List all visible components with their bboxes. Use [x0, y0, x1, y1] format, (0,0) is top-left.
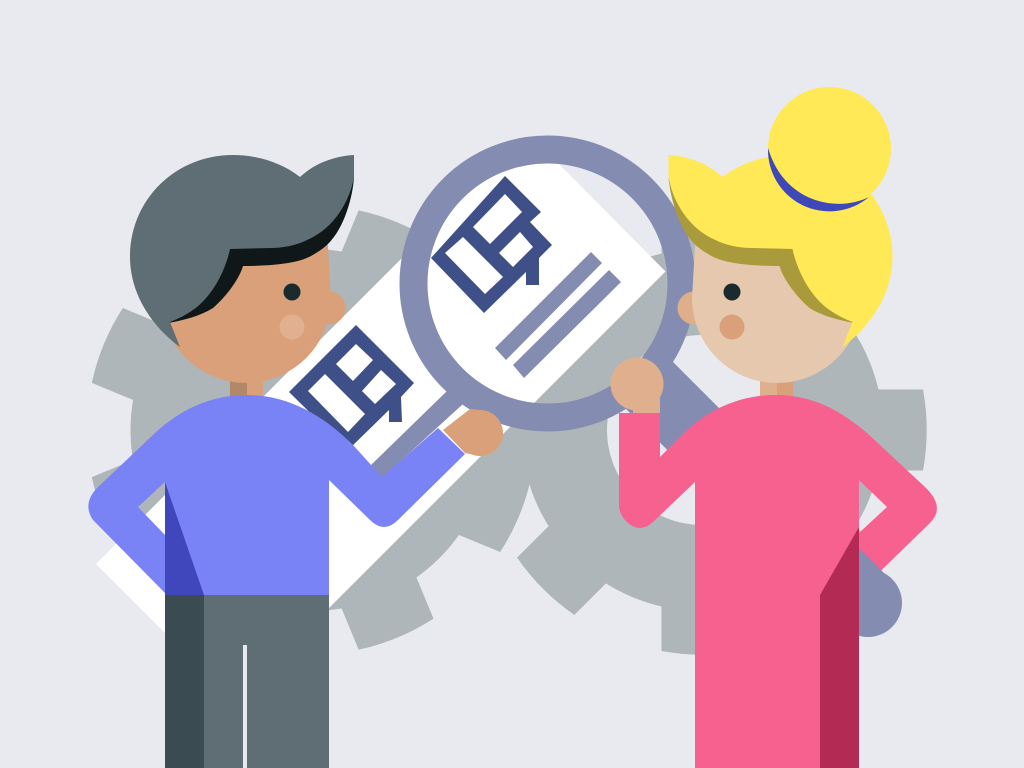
icon: right gear: [477, 205, 927, 655]
man neck: [230, 376, 263, 402]
woman head: [668, 87, 892, 383]
woman neck: [760, 376, 793, 402]
woman eye: [724, 284, 740, 300]
woman hair: [668, 155, 892, 347]
icon: house symbol on document: [289, 325, 414, 450]
man head: [130, 155, 354, 383]
woman dress: [619, 395, 925, 768]
man face: [161, 200, 331, 383]
man hair shadow: [168, 170, 354, 323]
man eye: [284, 284, 300, 300]
magnified text lines: [495, 252, 621, 378]
magnifying glass ring: [414, 150, 682, 418]
magnifying glass handle: [623, 359, 902, 637]
man ear: [312, 292, 346, 324]
woman hair shadow: [668, 170, 854, 323]
man trousers: [165, 595, 329, 768]
icon: left gear: [88, 207, 542, 653]
man hair: [130, 155, 354, 347]
magnifying glass left strip: [370, 391, 463, 478]
woman dress shadow: [820, 527, 859, 768]
icon: magnified house symbol: [431, 176, 552, 313]
woman face: [692, 200, 862, 383]
woman cheek: [720, 314, 744, 340]
man shirt shadow: [165, 482, 204, 595]
woman hair band: [768, 148, 869, 211]
document sheet: [96, 150, 666, 702]
man cheek: [280, 314, 304, 340]
man hand: [443, 409, 503, 456]
woman hair bun: [768, 87, 891, 210]
woman hand: [610, 358, 664, 413]
woman lower arm: [859, 480, 937, 592]
woman ear: [678, 292, 710, 324]
man shirt: [88, 395, 465, 595]
